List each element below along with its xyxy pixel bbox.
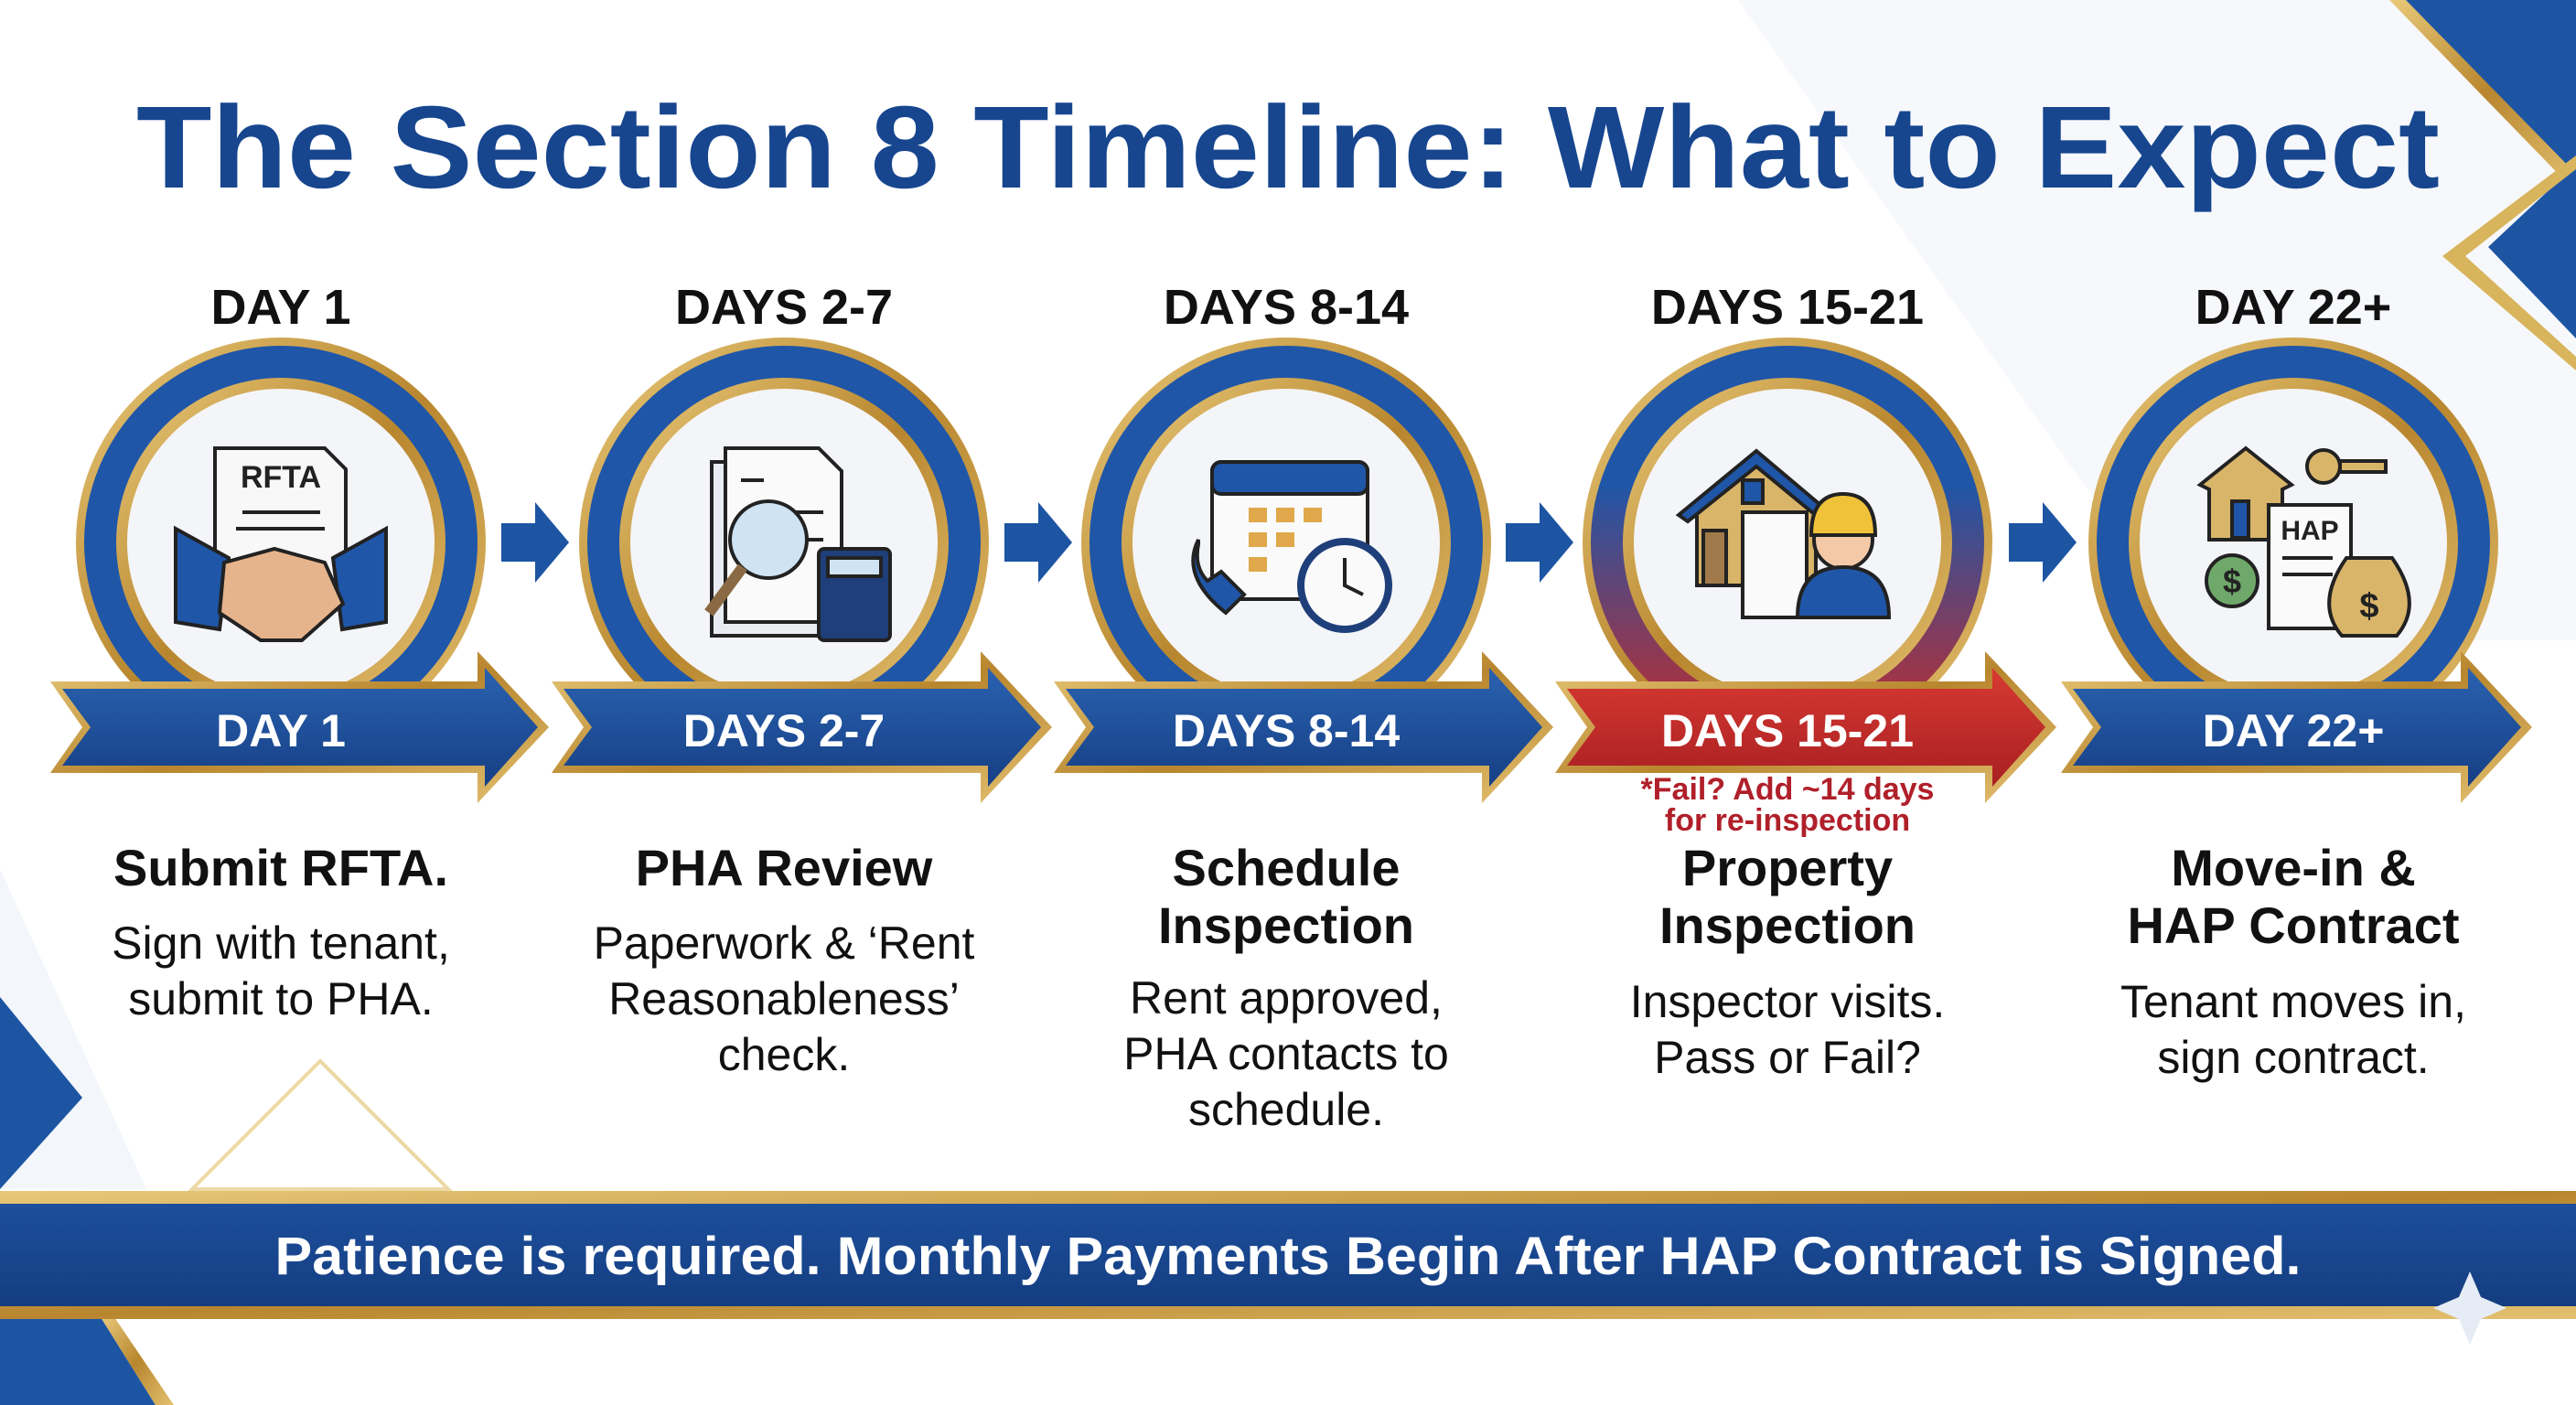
callout: fail note: for re-inspection: [1665, 803, 1910, 838]
ribbon 3: DAYS 8-14: [1173, 705, 1400, 756]
ribbon 1: [50, 651, 549, 803]
icon: house key HAP contract money: [2200, 448, 2410, 636]
text block 4: Inspector visits.: [1630, 976, 1945, 1027]
text block 1: Sign with tenant,: [112, 917, 450, 969]
circle badge 2: [579, 338, 989, 747]
ribbon 5: [2061, 651, 2532, 803]
text block 4: [1630, 839, 1945, 1083]
icon: house inspector: [1679, 451, 1889, 617]
text block 1: submit to PHA.: [128, 973, 434, 1024]
text block 5: Tenant moves in,: [2120, 976, 2466, 1027]
icon: document magnifier calculator: [709, 448, 890, 640]
day headings: DAYS 15-21: [1651, 280, 1924, 335]
text block 2: Reasonableness’: [608, 973, 960, 1024]
text block 5: Move-in &: [2171, 839, 2416, 896]
text block 5: HAP Contract: [2127, 896, 2460, 954]
day headings: DAY 1: [210, 280, 351, 335]
text block 4: Inspection: [1659, 896, 1916, 954]
callout: fail note: *Fail? Add ~14 days: [1641, 772, 1934, 807]
text block 5: sign contract.: [2157, 1032, 2430, 1083]
stage 2: [552, 338, 1052, 1080]
text block 2: Paperwork & ‘Rent: [594, 917, 975, 969]
text block 2: PHA Review: [636, 839, 933, 896]
title: The Section 8 Timeline: What to Expect: [136, 82, 2440, 213]
text block 5: [2120, 839, 2466, 1083]
text block 2: [594, 839, 975, 1080]
ribbon 4: [1555, 651, 2056, 803]
text block 2: check.: [718, 1029, 850, 1080]
ribbon 2: DAYS 2-7: [683, 705, 885, 756]
text block 3: [1123, 839, 1449, 1135]
text block 3: Rent approved,: [1130, 972, 1443, 1024]
icon: RFTA handshake: RFTA: [241, 460, 321, 495]
callout: fail note: [1641, 772, 1934, 838]
day headings: DAYS 2-7: [675, 280, 893, 335]
circle badge 3: [1081, 338, 1491, 747]
text block 3: Schedule: [1173, 839, 1400, 896]
day headings: [210, 280, 2391, 335]
icon: RFTA handshake: [176, 448, 386, 640]
text block 3: Inspection: [1158, 896, 1414, 954]
ribbon 1: DAY 1: [216, 705, 346, 756]
text block 1: Submit RFTA.: [113, 839, 448, 896]
circle badge 1: [76, 338, 486, 747]
circle badge 4: [1583, 338, 1992, 747]
icon: house key HAP contract money: $: [2359, 587, 2379, 626]
connector arrows: [501, 502, 2077, 583]
stage 1: [50, 338, 549, 1024]
text block 3: PHA contacts to: [1123, 1028, 1449, 1079]
text block 4: Pass or Fail?: [1654, 1032, 1921, 1083]
day headings: DAYS 8-14: [1164, 280, 1409, 335]
icon: sparkle: [2433, 1271, 2506, 1345]
text block 1: [112, 839, 450, 1024]
text block 4: Property: [1682, 839, 1893, 896]
bottom banner: [0, 1191, 2576, 1319]
stage 4: [1555, 338, 2056, 1083]
icon: calendar phone clock: [1193, 462, 1389, 629]
bottom banner: Patience is required. Monthly Payments Begin After HAP Contract is Signed.: [274, 1227, 2302, 1286]
ribbon 4: DAYS 15-21: [1661, 705, 1914, 756]
ribbon 3: [1054, 651, 1553, 803]
icon: house key HAP contract money: $: [2223, 563, 2241, 600]
text block 3: schedule.: [1188, 1084, 1384, 1135]
day headings: DAY 22+: [2195, 280, 2391, 335]
icon: house key HAP contract money: HAP: [2281, 516, 2339, 546]
stage 5: [2061, 338, 2532, 1083]
ribbon 5: DAY 22+: [2203, 705, 2384, 756]
ribbon 2: [552, 651, 1052, 803]
stage 3: [1054, 338, 1553, 1135]
circle badge 5: [2088, 338, 2498, 747]
